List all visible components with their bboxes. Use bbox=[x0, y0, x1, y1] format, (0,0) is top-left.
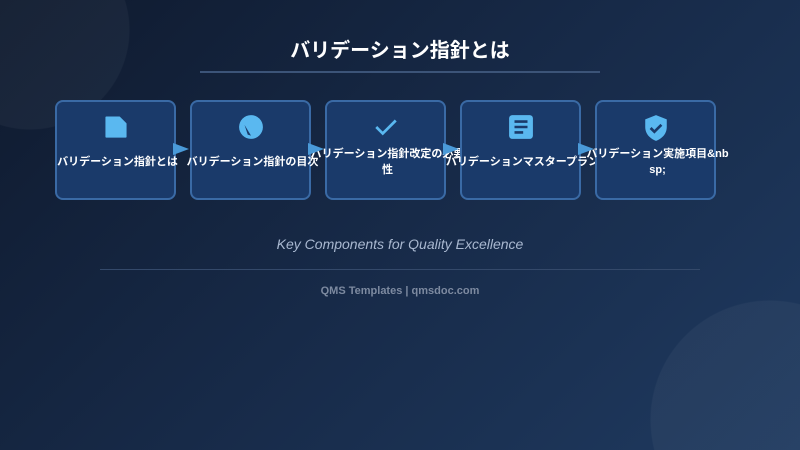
icon: shield bbox=[645, 115, 667, 141]
card 3 bbox=[325, 100, 446, 200]
arrow bbox=[173, 143, 189, 155]
label: バリデーション指針の目次 bbox=[187, 156, 318, 168]
arrow bbox=[308, 143, 324, 155]
icon: compass bbox=[239, 115, 263, 139]
label bbox=[311, 147, 464, 176]
icon: document bbox=[105, 116, 127, 138]
card 1 bbox=[55, 100, 176, 200]
icon: list bbox=[509, 115, 533, 139]
label: 性 bbox=[382, 164, 393, 176]
subtitle: Key Components for Quality Excellence bbox=[277, 236, 523, 252]
card 2 bbox=[190, 100, 311, 200]
arrow bbox=[578, 143, 594, 155]
label bbox=[586, 147, 729, 176]
footer: QMS Templates | qmsdoc.com bbox=[321, 285, 479, 297]
card 5 bbox=[595, 100, 716, 200]
label: バリデーション実施項目&nb bbox=[586, 148, 729, 160]
icon: check bbox=[375, 120, 397, 136]
label: バリデーション指針とは bbox=[57, 156, 178, 168]
label: バリデーション指針改定の必要 bbox=[311, 148, 464, 160]
card 4 bbox=[460, 100, 581, 200]
label: sp; bbox=[649, 164, 666, 176]
label: バリデーションマスタープラン bbox=[446, 156, 599, 168]
title: バリデーション指針とは bbox=[290, 40, 510, 62]
arrow bbox=[443, 143, 459, 155]
